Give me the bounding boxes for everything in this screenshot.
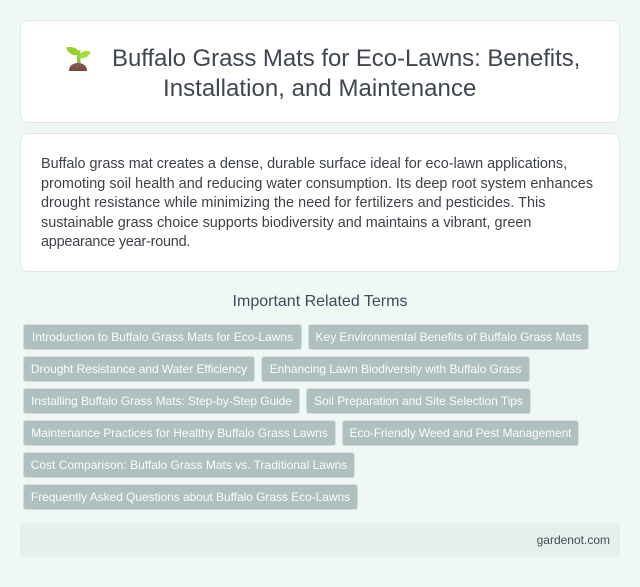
related term tags: Soil Preparation and Site Selection Tips <box>314 394 523 408</box>
related term tags: Cost Comparison: Buffalo Grass Mats vs. Traditional Lawns <box>31 458 347 472</box>
title text <box>112 45 580 102</box>
related term tags: Introduction to Buffalo Grass Mats for Eco-Lawns <box>32 330 293 344</box>
description text: Buffalo grass mat creates a dense, durable surface ideal for eco-lawn applications, <box>41 156 567 172</box>
related term tags: Enhancing Lawn Biodiversity with Buffalo Grass <box>270 362 521 376</box>
title panel <box>20 20 620 123</box>
description text: appearance year-round. <box>41 234 190 250</box>
related term tags: Eco-Friendly Weed and Pest Management <box>350 426 571 440</box>
description text: drought resistance while minimizing the need for fertilizers and pesticides. This <box>41 195 546 211</box>
related term tags: Frequently Asked Questions about Buffalo Grass Eco-Lawns <box>31 490 350 504</box>
description text: promoting soil health and reducing water consumption. Its deep root system enhances <box>41 176 593 192</box>
related term tags: Installing Buffalo Grass Mats: Step-by-Step Guide <box>31 394 292 408</box>
description text <box>41 156 593 250</box>
related term tags: Key Environmental Benefits of Buffalo Grass Mats <box>316 330 581 344</box>
footer source text: gardenot.com <box>537 533 610 547</box>
related term tags: Maintenance Practices for Healthy Buffalo Grass Lawns <box>31 426 328 440</box>
description panel <box>20 133 620 272</box>
heading: important related terms: Important Related Terms <box>233 293 407 310</box>
footer bar <box>20 523 620 557</box>
title text: Buffalo Grass Mats for Eco-Lawns: Benefits, <box>112 45 580 72</box>
related term tags: Drought Resistance and Water Efficiency <box>31 362 247 376</box>
title text: Installation, and Maintenance <box>163 75 476 102</box>
related term tags <box>23 324 589 510</box>
description text: sustainable grass choice supports biodiversity and maintains a vibrant, green <box>41 215 531 231</box>
icon: seedling <box>66 47 90 71</box>
